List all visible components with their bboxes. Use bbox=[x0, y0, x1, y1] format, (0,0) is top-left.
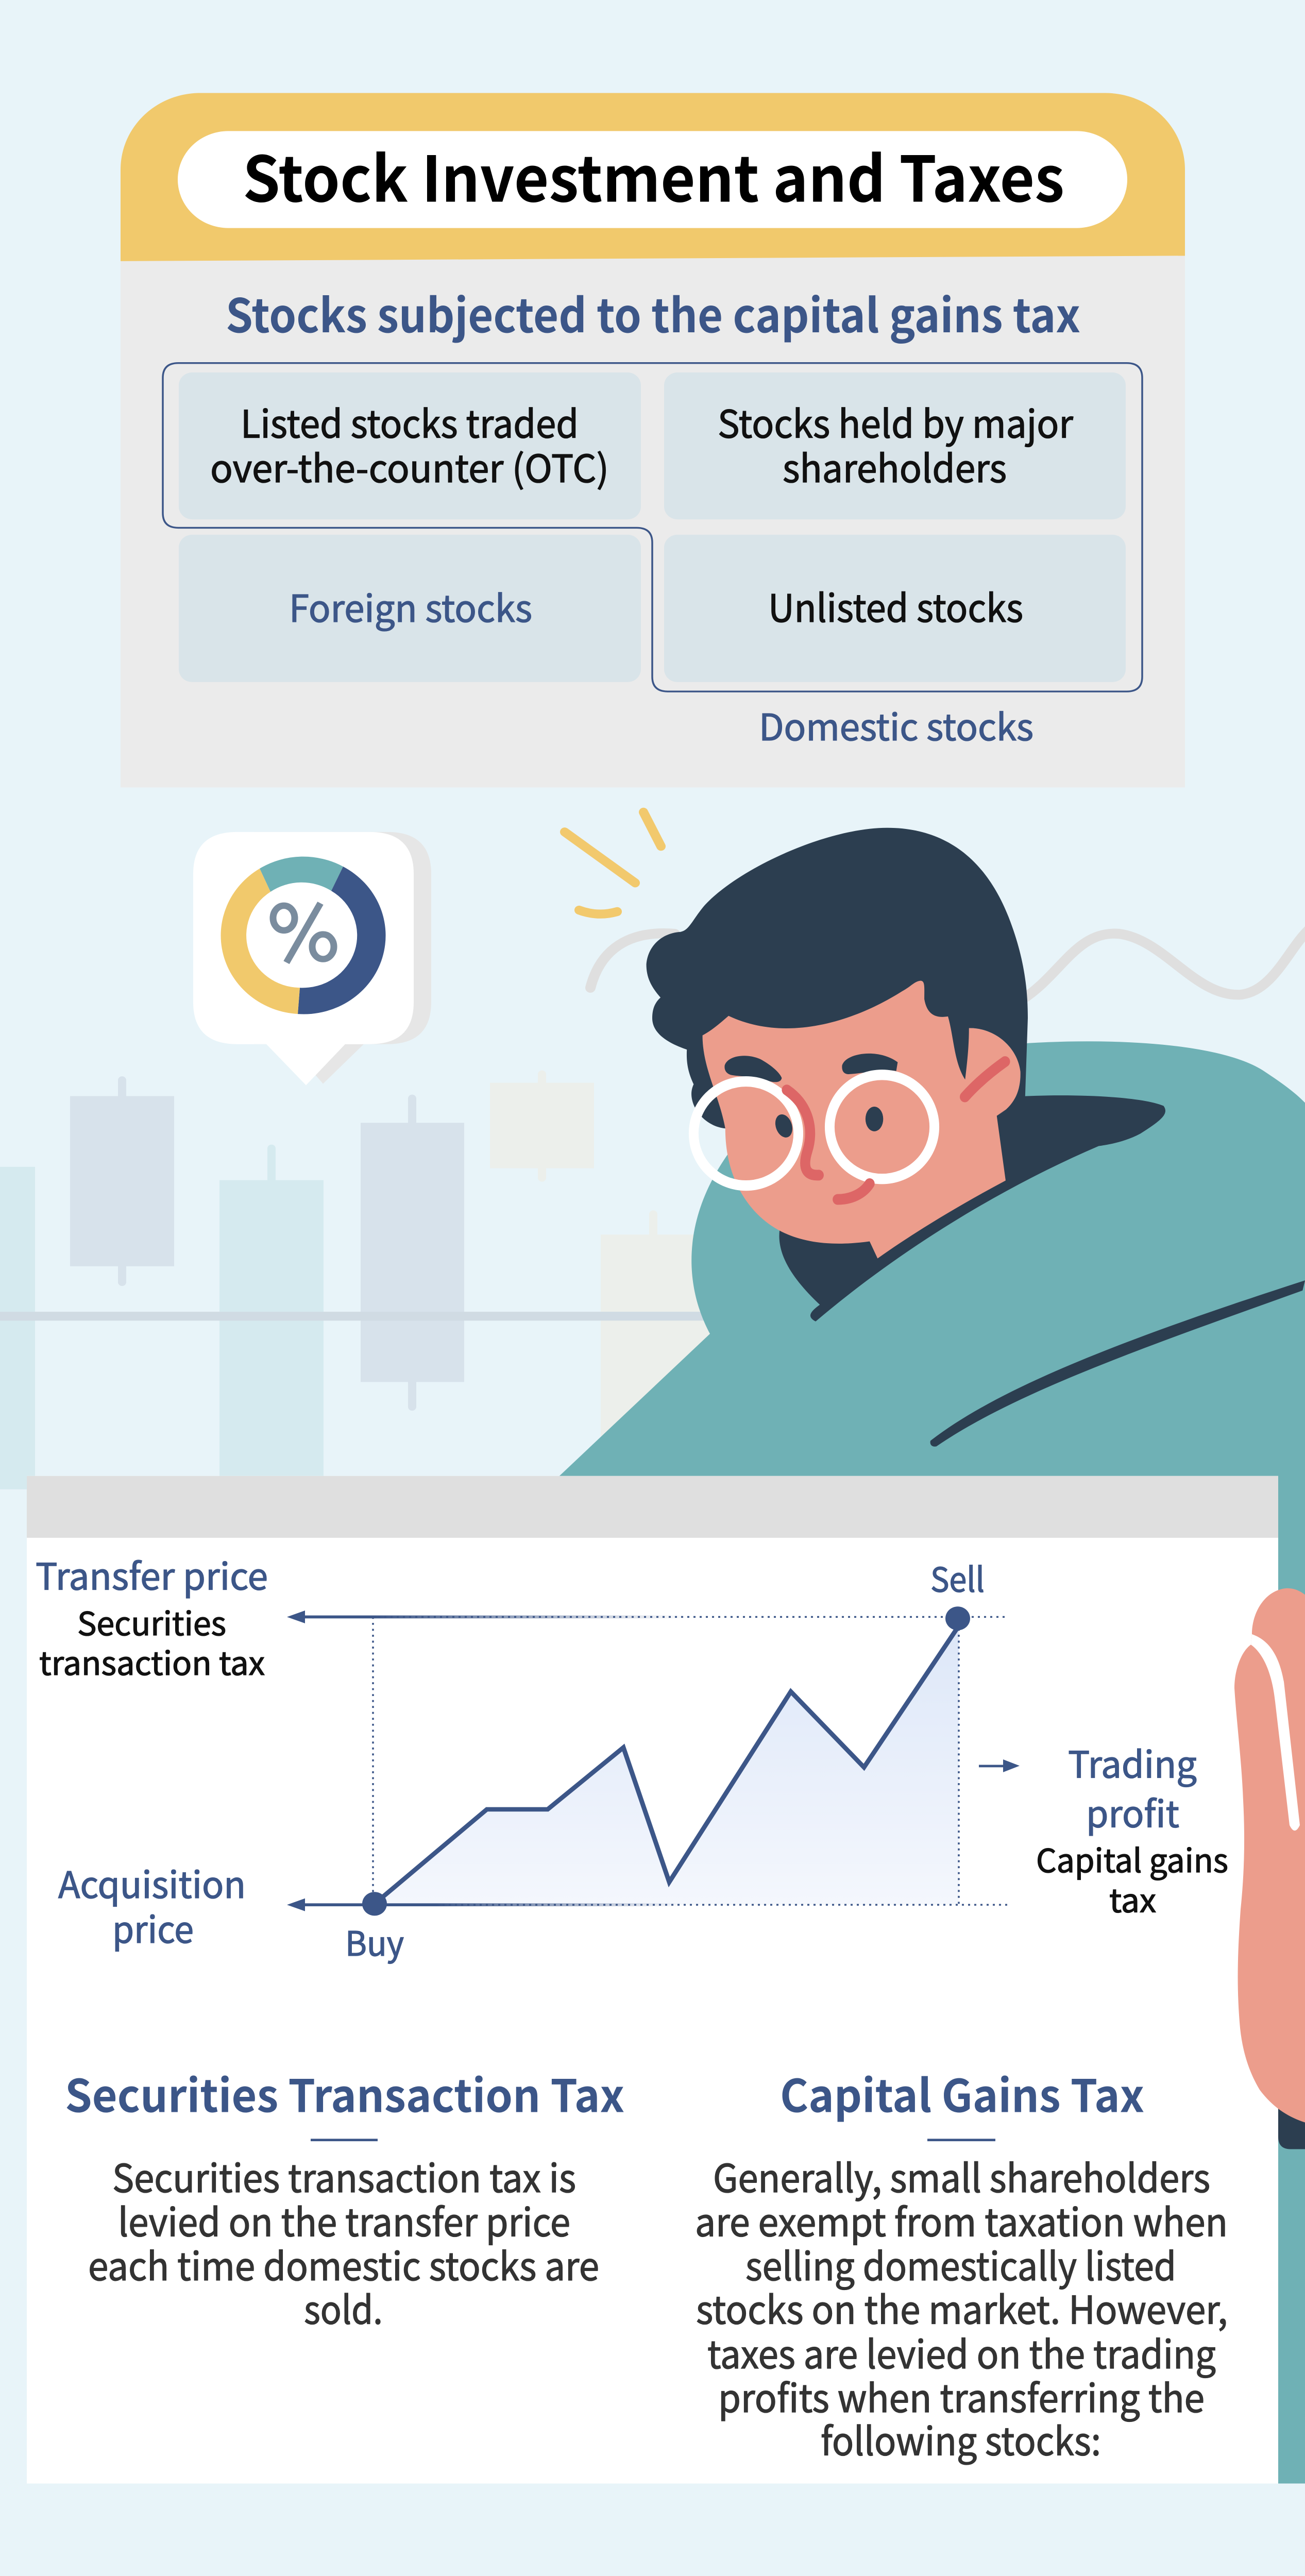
label: trading profit: profit bbox=[1086, 1785, 1179, 1838]
teal strip on right edge bbox=[1278, 1476, 1305, 2483]
body text: following stocks: bbox=[821, 2411, 1101, 2467]
box: foreign stocks: Foreign stocks bbox=[289, 580, 532, 633]
body text: selling domestically listed bbox=[745, 2236, 1176, 2292]
label: transfer price: Transfer price bbox=[36, 1547, 268, 1600]
label: trading profit: Capital gains bbox=[1036, 1835, 1228, 1882]
body text: Generally, small shareholders bbox=[713, 2148, 1210, 2204]
body text bbox=[88, 2148, 599, 2335]
section: capital gains tax bbox=[695, 2060, 1228, 2467]
label: acquisition price bbox=[58, 1855, 246, 1954]
glasses bbox=[693, 1075, 935, 1185]
nose, mouth, ear mark bbox=[787, 1061, 1005, 1199]
label: acquisition price: Acquisition bbox=[58, 1855, 246, 1908]
label: trading profit bbox=[1036, 1735, 1228, 1922]
body text: stocks on the market. However, bbox=[696, 2279, 1228, 2335]
box: listed OTC stocks: Listed stocks traded bbox=[241, 393, 579, 449]
body text: profits when transferring the bbox=[718, 2368, 1205, 2424]
subheading: Stocks subjected to the capital gains tax bbox=[226, 278, 1080, 346]
label: acquisition price: price bbox=[112, 1901, 194, 1954]
shaded area bbox=[375, 1626, 959, 1905]
finger line bbox=[1251, 1634, 1300, 1831]
grey header bar bbox=[27, 1476, 1278, 1538]
dark collar bbox=[779, 1095, 1165, 1321]
arrowheads bbox=[287, 1611, 305, 1623]
body text: levied on the transfer price bbox=[118, 2192, 570, 2248]
character: worried man in teal hoodie bbox=[560, 828, 1305, 1481]
decorative grey wave bbox=[590, 930, 1305, 999]
sell point bbox=[945, 1606, 970, 1630]
section: securities transaction tax bbox=[65, 2060, 624, 2335]
body text: are exempt from taxation when bbox=[695, 2192, 1228, 2248]
title: Stock Investment and Taxes bbox=[243, 129, 1064, 220]
icon: yellow surprise marks bbox=[565, 812, 661, 914]
box: listed OTC stocks: over-the-counter (OTC) bbox=[210, 438, 609, 494]
arrow to trading profit bbox=[979, 1759, 1020, 1772]
label: transfer price: transaction tax bbox=[39, 1638, 265, 1684]
hoodie seam bbox=[930, 1280, 1305, 1447]
panel: stocks subjected to capital gains tax bbox=[121, 93, 1185, 787]
hoodie body bbox=[560, 1041, 1305, 1481]
eyebrows bbox=[724, 1056, 782, 1082]
box: major shareholders bbox=[664, 372, 1126, 519]
hand bbox=[1234, 1588, 1305, 2123]
face bbox=[703, 974, 1021, 1259]
title pill bbox=[178, 131, 1127, 228]
label: trading profit: tax bbox=[1109, 1875, 1156, 1922]
box: major shareholders: shareholders bbox=[783, 438, 1007, 494]
header band bbox=[121, 93, 1185, 261]
body text: Securities transaction tax is bbox=[112, 2148, 576, 2204]
label: transfer price bbox=[36, 1547, 268, 1684]
section: capital gains tax: Capital Gains Tax bbox=[780, 2060, 1144, 2125]
body text bbox=[695, 2148, 1228, 2467]
body text: taxes are levied on the trading bbox=[707, 2324, 1216, 2380]
dark sleeve bbox=[1278, 2097, 1305, 2149]
buy point bbox=[362, 1892, 387, 1916]
box: unlisted stocks: Unlisted stocks bbox=[768, 578, 1023, 633]
label: trading profit: Trading bbox=[1068, 1735, 1197, 1788]
box: foreign stocks bbox=[179, 535, 641, 682]
domestic stocks outline bbox=[163, 363, 1142, 691]
domestic stocks label: Domestic stocks bbox=[759, 698, 1033, 751]
head bbox=[647, 828, 1028, 1259]
body text: each time domestic stocks are bbox=[88, 2236, 599, 2292]
label: buy: Buy bbox=[345, 1918, 404, 1966]
price line bbox=[375, 1626, 959, 1904]
label: sell: Sell bbox=[930, 1553, 985, 1602]
eyes bbox=[772, 1112, 795, 1140]
body text: sold. bbox=[304, 2279, 383, 2335]
chart: buy and sell price line bbox=[287, 1606, 1020, 1916]
illustration: hand holding the panel bbox=[1234, 1588, 1305, 2149]
box: major shareholders: Stocks held by major bbox=[718, 393, 1074, 449]
box: unlisted stocks bbox=[664, 535, 1126, 682]
box: listed OTC stocks bbox=[179, 372, 641, 519]
label: transfer price: Securities bbox=[77, 1598, 226, 1645]
section: securities transaction tax: Securities Transaction Tax bbox=[65, 2060, 624, 2125]
hair bbox=[647, 828, 1028, 1128]
donut chart bbox=[221, 857, 386, 1014]
candlestick background bbox=[0, 1071, 755, 1489]
icon: speech bubble with percent donut bbox=[193, 832, 431, 1085]
panel: chart and tax explanations bbox=[27, 1476, 1278, 2483]
percent sign bbox=[273, 903, 334, 962]
